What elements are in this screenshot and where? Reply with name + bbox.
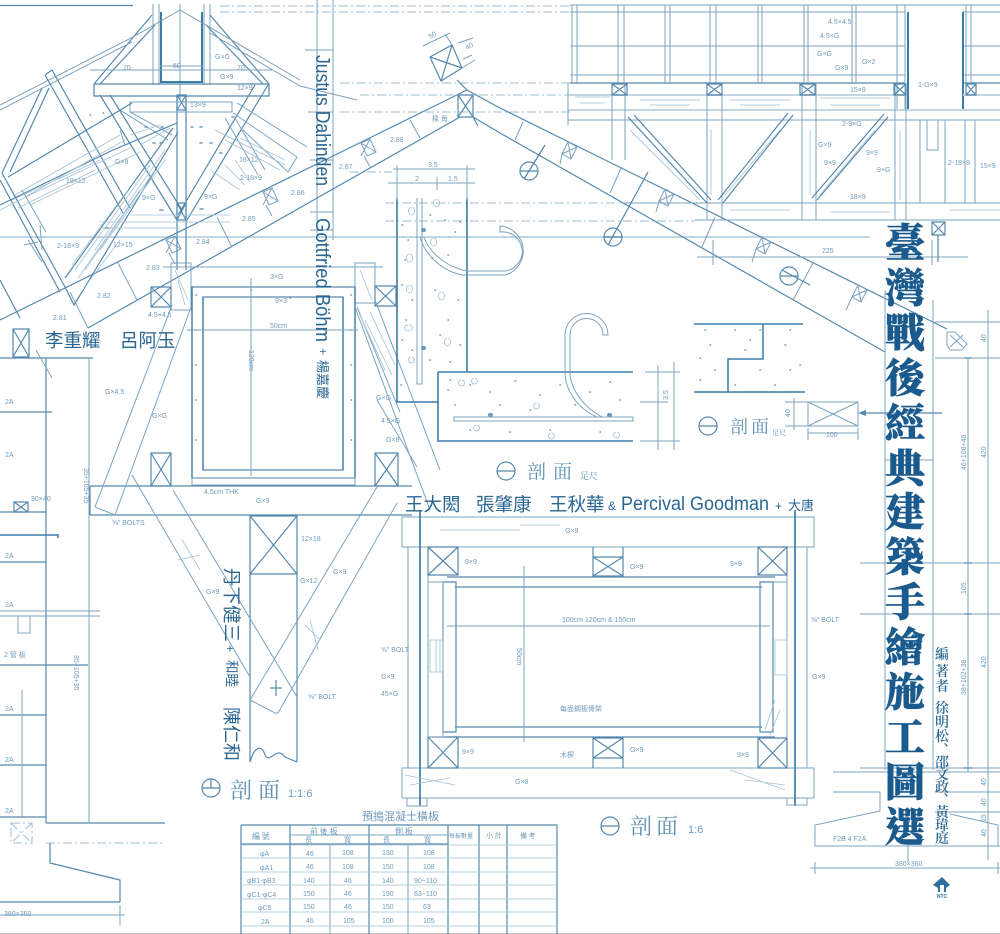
- elevation drawing: top right trusses: 4.5×G: [820, 33, 839, 40]
- section captions: 剖: [230, 774, 252, 805]
- elevation drawing: top right trusses: 9×G: [877, 167, 890, 174]
- concrete formwork schedule table: 46: [344, 891, 352, 898]
- section markers with leader lines: [202, 145, 810, 835]
- architect names: 李重耀, 呂阿玉: [45, 330, 176, 351]
- upper left truss: 12×15: [113, 242, 133, 249]
- section captions: [230, 413, 786, 841]
- concrete formwork schedule table: 前 後 板: [310, 826, 338, 837]
- section captions: 剖: [527, 457, 546, 484]
- editors: 徐明松、邵文政、黃瑋庭: [935, 701, 953, 847]
- upper left truss: 9×G: [142, 195, 155, 202]
- left edge plan: beams and footing: 2A: [5, 706, 14, 713]
- elevation drawing: top right trusses: 9×9: [866, 150, 878, 157]
- architect names: 丹下健三, 和睦, 陳仁和: 陳仁和: [221, 707, 241, 761]
- architect names: 王大閎, 張肇康, 王秋華, Percival Goodman, 大唐: &: [608, 499, 616, 513]
- section drawing: left column form: G×4.5: [105, 389, 124, 396]
- section drawing: left column form: 50cm: [270, 323, 287, 330]
- concrete formwork schedule table: φB1-φB3: [247, 878, 276, 885]
- section drawing: right rectangular form: G×9: [630, 564, 644, 571]
- right edge dimensions: 40: [981, 798, 988, 806]
- book title: 臺灣戰後經典建築手繪施工圖選: [885, 221, 932, 850]
- elevation drawing: top right trusses: 15×9: [980, 163, 996, 170]
- architect names: 王大閎, 張肇康, 王秋華, Percival Goodman, 大唐: +: [775, 499, 782, 513]
- concrete formwork schedule table: φC1-φC4: [247, 892, 276, 899]
- concrete formwork schedule table: 150: [303, 904, 315, 911]
- upper left truss: 18×12: [66, 178, 86, 185]
- elevation drawing: top right trusses: 18×9: [850, 194, 866, 201]
- roof band: left slope: 2.88: [390, 137, 404, 144]
- concrete formwork schedule table: 2A: [261, 919, 270, 926]
- section drawing: right rectangular form: G×9: [565, 528, 579, 535]
- concrete formwork schedule table: 長: [383, 835, 390, 845]
- section drawing: concrete wall detail: [388, 162, 680, 450]
- concrete formwork schedule table: 150: [303, 891, 315, 898]
- section drawing: left column form: ⅝″ BOLT: [308, 694, 337, 701]
- elevation drawing: top right trusses: G×9: [835, 65, 849, 72]
- section drawing: right rectangular form: 每面鋼板骨架: [560, 704, 602, 713]
- concrete formwork schedule table: 108: [423, 850, 435, 857]
- publisher logo: NTC: [937, 894, 948, 900]
- section drawing: right rectangular form: G×9: [515, 779, 529, 786]
- section drawing: left column form: [90, 263, 440, 762]
- elevation drawing: top right trusses: G×G: [817, 51, 832, 58]
- upper left truss: 9×G: [204, 194, 217, 201]
- roof band: left slope: 2.85: [242, 216, 256, 223]
- concrete corner detail with box: [694, 324, 858, 440]
- concrete corner detail with box: 100: [826, 432, 838, 439]
- roof band: left slope: 樑 角: [432, 114, 448, 123]
- upper left truss: 18×12: [239, 157, 259, 164]
- concrete formwork schedule table: 側 板: [395, 826, 413, 837]
- section drawing: right rectangular form: G×9: [381, 674, 395, 681]
- concrete formwork schedule table: 140: [382, 878, 394, 885]
- left edge plan: beams and footing: [0, 329, 165, 925]
- concrete formwork schedule table: 105: [343, 918, 355, 925]
- architect names: 丹下健三, 和睦, 陳仁和: 和睦: [224, 660, 239, 687]
- section drawing: right rectangular form: 9×9: [465, 559, 477, 566]
- left edge plan: beams and footing: 2A: [5, 399, 14, 406]
- section drawing: left column form: G×9: [256, 498, 270, 505]
- concrete formwork schedule table: 46: [306, 918, 314, 925]
- publisher logo: [933, 877, 950, 900]
- section drawing: right rectangular form: 9×9: [730, 561, 742, 568]
- top small rotated box with dimensions: [423, 31, 475, 81]
- section drawing: right rectangular form: ⅝″ BOLT: [381, 647, 410, 654]
- section captions: 面: [751, 413, 769, 439]
- architect names: 王大閎, 張肇康, 王秋華, Percival Goodman, 大唐: 王秋華: [549, 494, 605, 515]
- roof band: left slope: 2.81: [53, 315, 67, 322]
- section captions: 足尺: [580, 469, 598, 482]
- upper left truss: G×9: [115, 159, 129, 166]
- concrete formwork schedule table: 長: [305, 835, 312, 845]
- architect names: 丹下健三, 和睦, 陳仁和: 丹下健三: [221, 568, 242, 642]
- section drawing: right rectangular form: G×9: [630, 747, 644, 754]
- right edge dimensions: [810, 290, 1000, 874]
- right edge dimensions: 105: [961, 582, 968, 594]
- elevation drawing: top right trusses: 15×9: [850, 87, 866, 94]
- elevation drawing: top right trusses: 1-G×9: [918, 82, 938, 89]
- section drawing: left column form: 120cm: [247, 350, 254, 371]
- section drawing: right rectangular form: 木楔: [560, 750, 574, 759]
- left edge plan: beams and footing: 380×360: [4, 911, 32, 918]
- concrete formwork schedule table: 46: [344, 878, 352, 885]
- section drawing: left column form: 12×18: [301, 536, 321, 543]
- concrete formwork schedule table: 小 計: [486, 831, 502, 841]
- concrete formwork schedule table: 備 考: [520, 831, 536, 841]
- section drawing: concrete wall detail: 1.5: [448, 176, 458, 183]
- architect names: Justus Dahinden, Gottfried Böhm, 楊嘉慶: Justus Dahinden: [311, 55, 333, 186]
- concrete formwork schedule table: 46: [306, 864, 314, 871]
- upper left truss: 70: [237, 65, 245, 72]
- section drawing: concrete wall detail: 3.5: [428, 162, 438, 169]
- section drawing: right rectangular form: [381, 510, 840, 806]
- right edge dimensions: 40: [981, 334, 988, 342]
- architect names: 王大閎, 張肇康, 王秋華, Percival Goodman, 大唐: 張肇康: [476, 494, 532, 515]
- section captions: 面: [553, 457, 572, 484]
- right edge dimensions: F2B 4 F2A: [833, 836, 867, 843]
- architect names: 王大閎, 張肇康, 王秋華, Percival Goodman, 大唐: 大唐: [788, 498, 814, 513]
- section drawing: left column form: 4.5×G: [381, 418, 400, 425]
- roof band: right slope: 225: [822, 248, 834, 255]
- right edge dimensions: 46+108+46: [961, 434, 968, 470]
- section drawing: left column form: 9×3: [275, 298, 287, 305]
- elevation drawing: top right trusses: 9×9: [824, 160, 836, 167]
- concrete formwork schedule table: 編 號: [252, 831, 270, 842]
- section drawing: left column form: G×9: [333, 569, 347, 576]
- concrete corner detail with box: 40: [785, 409, 792, 417]
- left edge plan: beams and footing: 2 管 板: [4, 650, 26, 659]
- concrete formwork schedule table: 每板數量: [449, 831, 473, 840]
- elevation drawing: top right trusses: G×2: [862, 59, 876, 66]
- right edge dimensions: 15: [981, 814, 988, 822]
- left edge plan: beams and footing: 2A: [5, 553, 14, 560]
- roof band: left slope: 2.84: [196, 239, 210, 246]
- roof band: left slope: [0, 80, 500, 328]
- section drawing: left column form: G×9: [386, 437, 400, 444]
- roof band: left slope: 2.82: [97, 293, 111, 300]
- roof band: left slope: 2.87: [339, 164, 353, 171]
- concrete formwork schedule table: 190: [382, 891, 394, 898]
- concrete formwork schedule table: 108: [342, 850, 354, 857]
- section drawing: right rectangular form: 50cm: [515, 648, 522, 665]
- architect names: 丹下健三, 和睦, 陳仁和: +: [223, 645, 237, 652]
- section captions: 面: [258, 774, 280, 805]
- section drawing: right rectangular form: 9×9: [737, 752, 749, 759]
- left edge plan: beams and footing: 2A: [5, 602, 14, 609]
- upper left truss: 2-18×9: [57, 243, 79, 250]
- concrete formwork schedule table: φA: [260, 851, 270, 858]
- roof band: right slope: [500, 108, 968, 352]
- upper left truss: 50: [173, 63, 181, 70]
- section drawing: left column form: 3×G: [270, 274, 283, 281]
- concrete formwork schedule table: 108: [423, 864, 435, 871]
- section captions: 面: [656, 810, 678, 841]
- concrete formwork schedule table: 90~110: [414, 878, 437, 885]
- section drawing: left column form: G×12: [300, 578, 317, 585]
- concrete formwork schedule table: [241, 808, 557, 934]
- editors: 編著者: [935, 647, 949, 695]
- section captions: 剖: [630, 810, 652, 841]
- concrete formwork schedule table: 108: [342, 864, 354, 871]
- upper left truss: [0, 4, 357, 318]
- concrete formwork schedule table: 46: [306, 851, 314, 858]
- concrete formwork schedule table: 130: [382, 850, 394, 857]
- section drawing: left column form: 4.5cm THK: [204, 489, 239, 496]
- right edge dimensions: 380×360: [895, 861, 923, 868]
- section captions: 剖: [730, 413, 748, 439]
- elevation drawing: top right trusses: 4.5×4.5: [828, 19, 852, 26]
- architect names: 李重耀, 呂阿玉: 呂阿玉: [120, 330, 176, 351]
- section drawing: left column form: G×G: [152, 413, 167, 420]
- section captions: 足尺: [772, 428, 786, 438]
- upper left truss: G×G: [215, 54, 230, 61]
- section captions: 1:6: [688, 824, 703, 836]
- elevation drawing: top right trusses: 2-18×9: [948, 160, 970, 167]
- left edge plan: beams and footing: 30×40: [31, 496, 51, 503]
- architect names: 王大閎, 張肇康, 王秋華, Percival Goodman, 大唐: 王大閎: [405, 494, 461, 515]
- concrete formwork schedule table: 150: [382, 904, 394, 911]
- concrete formwork schedule table: φC5: [258, 905, 272, 912]
- section captions: 1:1:6: [288, 788, 312, 800]
- concrete formwork schedule table: 預搗混凝士橫板: [362, 808, 439, 824]
- upper left truss: 2-18×9: [240, 175, 262, 182]
- concrete formwork schedule table: 寬: [344, 835, 351, 845]
- concrete formwork schedule table: 63: [423, 904, 431, 911]
- left edge plan: beams and footing: 2A: [5, 757, 14, 764]
- architect names: Justus Dahinden, Gottfried Böhm, 楊嘉慶: 楊嘉慶: [315, 360, 330, 399]
- top small rotated box with dimensions: 50: [428, 31, 438, 41]
- concrete formwork schedule table: 63~110: [414, 891, 437, 898]
- concrete formwork schedule table: 100: [382, 918, 394, 925]
- right edge dimensions: 38+102+38: [961, 659, 968, 695]
- section drawing: right rectangular form: 100cm 120cm & 150cm: [562, 617, 636, 624]
- concrete formwork schedule table: 46: [344, 904, 352, 911]
- right edge dimensions: 40: [981, 778, 988, 786]
- upper left truss: G×9: [220, 74, 234, 81]
- architect names: Justus Dahinden, Gottfried Böhm, 楊嘉慶: [311, 55, 333, 399]
- concrete formwork schedule table: 寬: [424, 835, 431, 845]
- concrete formwork schedule table: 140: [303, 878, 315, 885]
- upper left truss: 12×9: [237, 85, 253, 92]
- right edge dimensions: 420: [981, 656, 988, 668]
- roof band: left slope: 2.86: [291, 190, 305, 197]
- left edge plan: beams and footing: 35+105+35: [82, 468, 89, 504]
- architect names: 李重耀, 呂阿玉: 李重耀: [45, 330, 101, 351]
- concrete formwork schedule table: φA1: [260, 865, 273, 872]
- section drawing: right rectangular form: 45×G: [381, 691, 398, 698]
- architect names: Justus Dahinden, Gottfried Böhm, 楊嘉慶: Gottfried Böhm: [311, 218, 333, 342]
- section drawing: right rectangular form: ⅝″ BOLT: [811, 617, 840, 624]
- architect names: 丹下健三, 和睦, 陳仁和: [221, 568, 242, 761]
- left edge plan: beams and footing: 35+105+35: [72, 655, 79, 691]
- upper left truss: 13×9: [190, 102, 206, 109]
- right edge dimensions: 40: [981, 829, 988, 837]
- section drawing: right rectangular form: 9×9: [462, 749, 474, 756]
- architect names: 王大閎, 張肇康, 王秋華, Percival Goodman, 大唐: [405, 493, 814, 515]
- roof band: left slope: 2.83: [146, 265, 160, 272]
- section drawing: left column form: ⅝″ BOLTS: [112, 520, 145, 527]
- section drawing: left column form: G×9: [206, 589, 220, 596]
- concrete formwork schedule table: 105: [423, 918, 435, 925]
- section drawing: left column form: G×G: [376, 395, 391, 402]
- top small rotated box with dimensions: 40: [465, 42, 475, 52]
- section drawing: left column form: 4.5×4.5: [148, 312, 172, 319]
- architect names: 王大閎, 張肇康, 王秋華, Percival Goodman, 大唐: Percival Goodman: [621, 493, 769, 515]
- right edge dimensions: 420: [981, 446, 988, 458]
- section drawing: concrete wall detail: 2: [415, 176, 419, 183]
- upper left truss: 70: [123, 65, 131, 72]
- elevation drawing: top right trusses: 2-9×G: [842, 121, 862, 128]
- left edge plan: beams and footing: 2A: [5, 452, 14, 459]
- elevation drawing: top right trusses: [568, 5, 1000, 262]
- architect names: Justus Dahinden, Gottfried Böhm, 楊嘉慶: +: [316, 348, 330, 355]
- concrete formwork schedule table: 150: [382, 864, 394, 871]
- left edge plan: beams and footing: 2A: [5, 808, 14, 815]
- section drawing: right rectangular form: G×9: [812, 674, 826, 681]
- elevation drawing: top right trusses: G×9: [818, 142, 832, 149]
- section drawing: concrete wall detail: 3.5: [663, 390, 670, 400]
